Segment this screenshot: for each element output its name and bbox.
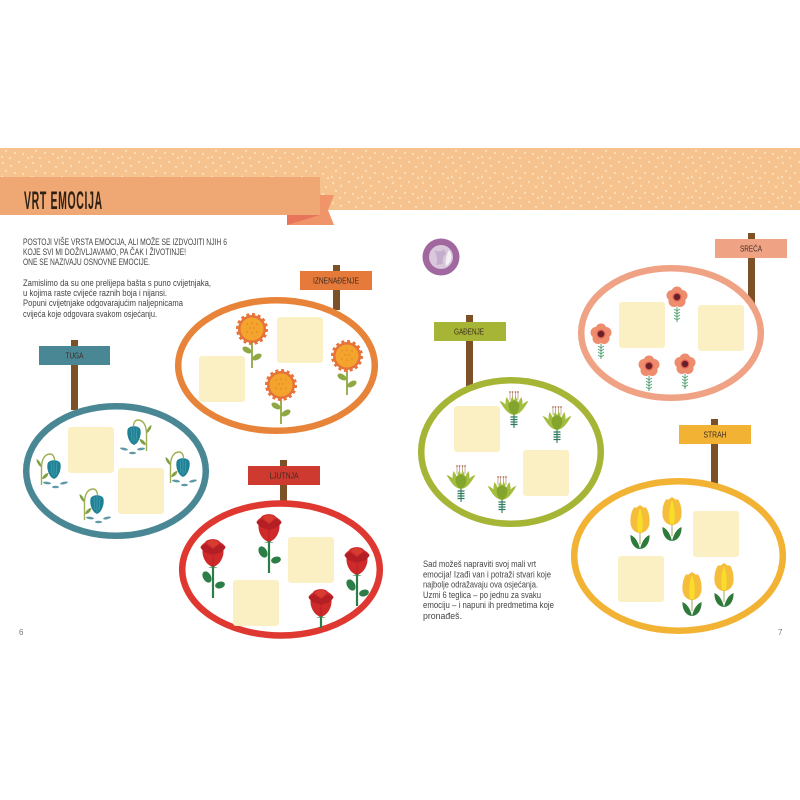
activity text: emocija! Izađi van i potraži stvari koje bbox=[423, 570, 551, 580]
sticker spaces: ljutnja bbox=[233, 537, 334, 626]
instruction text bbox=[23, 278, 211, 319]
panel: tuga bbox=[26, 340, 206, 536]
instruction text: u kojima raste cvijeće raznih boja i nijansi. bbox=[23, 288, 167, 298]
panel: sreća bbox=[581, 233, 787, 398]
intro text: ONE SE NAZIVAJU OSNOVNE EMOCIJE. bbox=[23, 257, 150, 267]
sticker spaces: sreća bbox=[619, 302, 744, 351]
flower bed: tuga bbox=[26, 406, 206, 536]
sticker spaces: strah bbox=[618, 511, 739, 602]
flower bed: strah bbox=[574, 481, 783, 631]
intro text: KOJE SVI MI DOŽIVLJAVAMO, PA ČAK I ŽIVOTINJE! bbox=[23, 247, 186, 257]
activity text: emociju – i napuni ih predmetima koje bbox=[423, 600, 554, 610]
signpost: ljutnja: LJUTNJA bbox=[270, 470, 299, 480]
intro text bbox=[23, 237, 227, 267]
flower bed: sreća bbox=[581, 268, 761, 398]
title: VRT EMOCIJA bbox=[24, 188, 102, 216]
flowers: tulips bbox=[630, 497, 734, 616]
flowers: sunflowers bbox=[238, 314, 362, 424]
instruction text: Zamislimo da su one prelijepa bašta s puno cvijetnjaka, bbox=[23, 278, 211, 288]
signpost: iznenađenje bbox=[300, 265, 372, 310]
instruction text: cvijeća koje odgovara svakom osjećanju. bbox=[23, 309, 157, 319]
flowers: bluebells bbox=[36, 420, 197, 523]
activity text: pronađeš. bbox=[423, 611, 462, 621]
flower bed: iznenađenje bbox=[178, 300, 375, 431]
flower bed: ljutnja bbox=[182, 504, 380, 636]
activity text bbox=[423, 559, 554, 621]
signpost: strah: STRAH bbox=[704, 430, 726, 440]
panel: strah bbox=[574, 419, 783, 631]
sticker spaces: gađenje bbox=[454, 406, 569, 496]
panel: iznenađenje bbox=[178, 265, 375, 431]
activity text: Sad možeš napraviti svoj mali vrt bbox=[423, 559, 536, 569]
sticker spaces: iznenađenje bbox=[199, 317, 323, 402]
signpost: sreća bbox=[715, 233, 787, 308]
signpost: sreća: SREĆA bbox=[740, 244, 762, 254]
signpost: gađenje: GAĐENJE bbox=[454, 326, 484, 336]
instruction text: Popuni cvijetnjake odgovarajućim naljepnicama bbox=[23, 298, 183, 308]
panel: gađenje bbox=[421, 315, 601, 524]
signpost: strah bbox=[679, 419, 751, 491]
signpost: tuga: TUGA bbox=[66, 350, 84, 360]
flowers: spiky plants bbox=[446, 391, 572, 513]
signpost: ljutnja bbox=[248, 460, 320, 505]
activity text: najbolje odražavaju ova osjećanja. bbox=[423, 580, 538, 590]
header band bbox=[0, 148, 800, 210]
intro text: POSTOJI VIŠE VRSTA EMOCIJA, ALI MOŽE SE IZDVOJITI NJIH 6 bbox=[23, 237, 227, 247]
sticker spaces: tuga bbox=[68, 427, 164, 514]
icon: sticker badge bbox=[422, 238, 460, 276]
flowers: poppies bbox=[590, 286, 696, 391]
signpost: iznenađenje: IZNENAĐENJE bbox=[313, 276, 359, 286]
flowers: roses bbox=[200, 514, 370, 628]
activity text: Uzmi 6 teglica – po jednu za svaku bbox=[423, 590, 541, 600]
title ribbon bbox=[0, 177, 334, 225]
signpost: tuga bbox=[39, 340, 110, 410]
page number 7: 7 bbox=[778, 628, 783, 637]
panel: ljutnja bbox=[182, 460, 380, 636]
flower bed: gađenje bbox=[421, 380, 601, 524]
signpost: gađenje bbox=[434, 315, 506, 390]
page number 6: 6 bbox=[19, 628, 24, 637]
